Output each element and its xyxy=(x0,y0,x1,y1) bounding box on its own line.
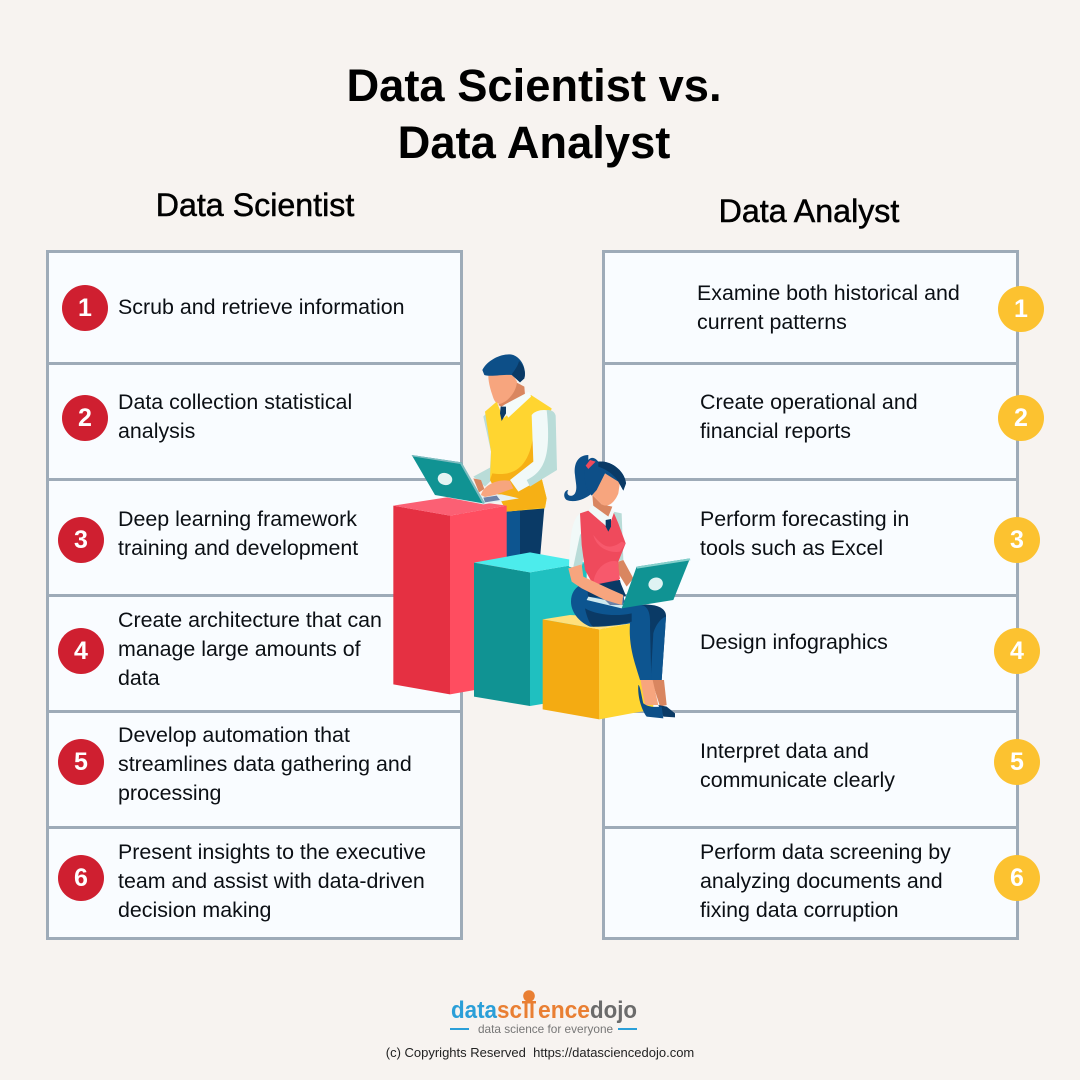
badge 1 xyxy=(998,286,1044,332)
text 3: Deep learning framework xyxy=(118,507,357,531)
row 4 xyxy=(602,594,1019,713)
text 5: processing xyxy=(118,781,221,805)
badge 2 xyxy=(62,395,108,441)
text 3 xyxy=(700,507,909,560)
teal block xyxy=(474,552,587,706)
woman: legs xyxy=(571,580,675,718)
badge 4: 4 xyxy=(1010,637,1024,665)
badge 6 xyxy=(994,855,1040,901)
badge 2 xyxy=(998,395,1044,441)
text 4: data xyxy=(118,666,160,690)
badge 1 xyxy=(62,285,108,331)
text 1: current patterns xyxy=(697,310,847,334)
panel: data analyst list xyxy=(602,250,1044,940)
logo: data science dojo xyxy=(450,990,637,1036)
copyright line: (c) Copyrights Reserved https://datasciencedojo.com xyxy=(386,1045,694,1060)
text 6: Perform data screening by xyxy=(700,840,951,864)
row 5 xyxy=(602,710,1019,829)
man standing xyxy=(473,354,557,558)
badge 2: 2 xyxy=(1014,404,1028,432)
badge 1: 1 xyxy=(1014,295,1028,323)
row 4 xyxy=(46,594,463,713)
text 1: Scrub and retrieve information xyxy=(118,295,405,319)
badge 3: 3 xyxy=(74,526,88,554)
text 2: analysis xyxy=(118,419,195,443)
wordmark xyxy=(451,997,637,1024)
text 6: fixing data corruption xyxy=(700,898,899,922)
text 1: Examine both historical and xyxy=(697,281,960,305)
text 6: team and assist with data-driven xyxy=(118,869,425,893)
woman: upper body and laptop xyxy=(564,455,690,608)
text 4: Design infographics xyxy=(700,630,888,654)
text 6: Present insights to the executive xyxy=(118,840,426,864)
text 5 xyxy=(118,723,412,805)
row 3 xyxy=(46,478,463,597)
tagline: data science for everyone xyxy=(478,1022,613,1036)
text 5: communicate clearly xyxy=(700,768,895,792)
badge 4 xyxy=(58,628,104,674)
tagline dash right xyxy=(618,1028,637,1030)
row 1 xyxy=(602,250,1019,365)
text 6: analyzing documents and xyxy=(700,869,943,893)
text 2: Create operational and xyxy=(700,390,918,414)
logo mark xyxy=(522,990,536,1018)
badge 6: 6 xyxy=(74,864,88,892)
red block xyxy=(393,497,507,694)
text 4: Create architecture that can xyxy=(118,608,382,632)
row 5 xyxy=(46,710,463,829)
text 4 xyxy=(118,608,382,690)
text 2 xyxy=(118,390,352,443)
row 3 xyxy=(602,478,1019,597)
badge 3 xyxy=(994,517,1040,563)
text 3: tools such as Excel xyxy=(700,536,883,560)
row 2 xyxy=(602,362,1019,481)
panel: data scientist list xyxy=(46,250,463,940)
badge 4: 4 xyxy=(74,637,88,665)
text 3: training and development xyxy=(118,536,358,560)
row 6 xyxy=(46,826,463,940)
badge 5 xyxy=(994,739,1040,785)
badge 3: 3 xyxy=(1010,526,1024,554)
yellow block xyxy=(543,615,653,719)
row 2 xyxy=(46,362,463,481)
text 5: streamlines data gathering and xyxy=(118,752,412,776)
wordmark: data xyxy=(451,997,498,1024)
text 6: decision making xyxy=(118,898,271,922)
text 5: Develop automation that xyxy=(118,723,350,747)
text 3: Perform forecasting in xyxy=(700,507,909,531)
text 5: Interpret data and xyxy=(700,739,869,763)
badge 1: 1 xyxy=(78,294,92,322)
badge 2: 2 xyxy=(78,404,92,432)
title: Data Scientist vs. xyxy=(346,60,722,111)
badge 5: 5 xyxy=(1010,748,1024,776)
title xyxy=(346,60,722,168)
badge 6: 6 xyxy=(1010,864,1024,892)
illustration: two analysts on coloured blocks xyxy=(393,354,690,720)
text 3 xyxy=(118,507,358,560)
wordmark: ence xyxy=(538,997,590,1024)
text 6 xyxy=(118,840,426,922)
laptop: man xyxy=(412,455,519,504)
badge 4 xyxy=(994,628,1040,674)
text 2: financial reports xyxy=(700,419,851,443)
wordmark: sc xyxy=(497,997,522,1024)
badge 3 xyxy=(58,517,104,563)
row 1 xyxy=(46,250,463,365)
text 1 xyxy=(697,281,960,334)
badge 6 xyxy=(58,855,104,901)
heading: data scientist: Data Scientist xyxy=(156,187,354,223)
title: Data Analyst xyxy=(398,117,670,168)
tagline dash left xyxy=(450,1028,469,1030)
badge 5 xyxy=(58,739,104,785)
badge 5: 5 xyxy=(74,748,88,776)
text 6 xyxy=(700,840,951,922)
text 2: Data collection statistical xyxy=(118,390,352,414)
heading: data analyst: Data Analyst xyxy=(719,193,899,229)
text 4: manage large amounts of xyxy=(118,637,361,661)
wordmark: dojo xyxy=(590,997,637,1024)
text 2 xyxy=(700,390,918,443)
row 6 xyxy=(602,826,1019,940)
text 5 xyxy=(700,739,895,792)
